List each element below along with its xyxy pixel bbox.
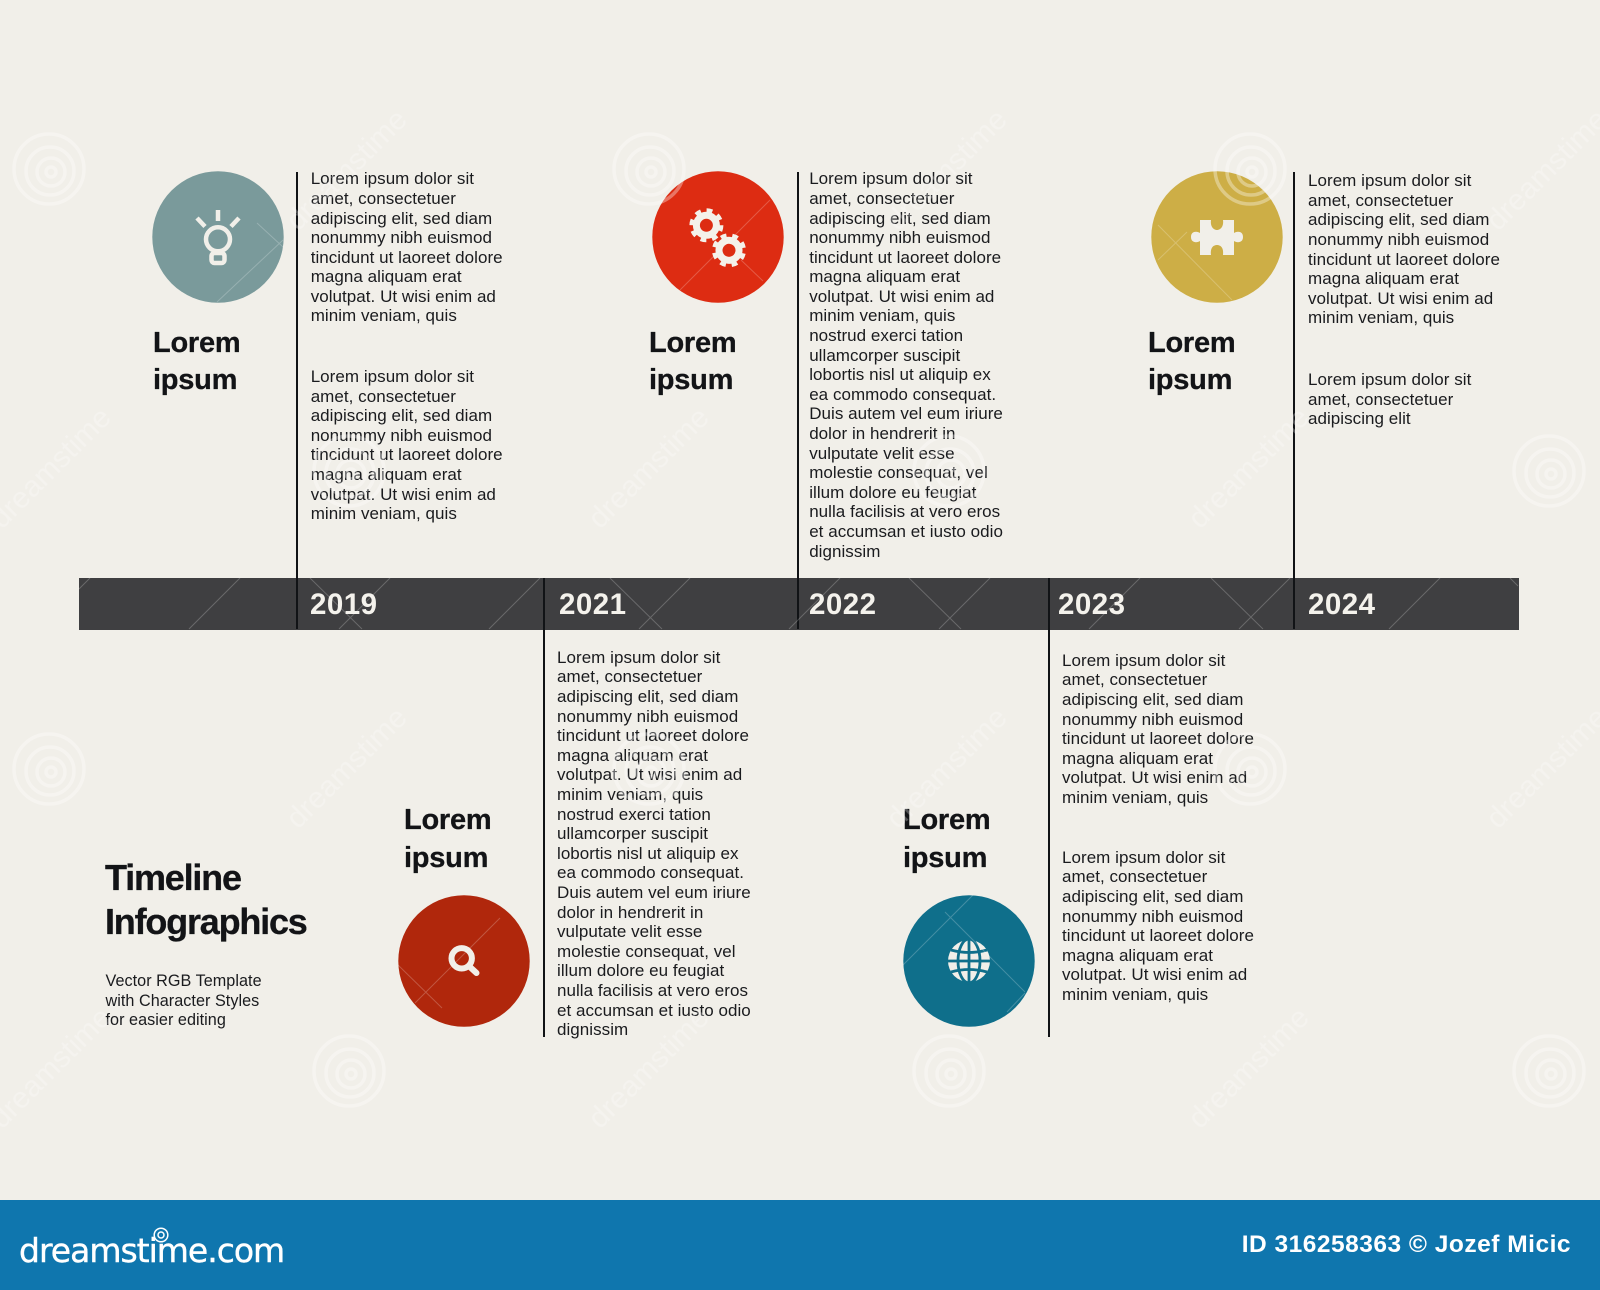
heading: Lorem (404, 804, 491, 836)
text block 2: volutpat. Ut wisi enim ad (311, 485, 496, 504)
heading (153, 326, 240, 396)
watermark overlay: dreamstime (1182, 1001, 1316, 1135)
watermark overlay: dreamstime (280, 103, 414, 237)
text block 2: amet, consectetuer (1062, 867, 1207, 886)
text block 2: amet, consectetuer (311, 387, 456, 406)
text block 1: adipiscing elit, sed diam (311, 208, 492, 228)
subtitle: for easier editing (106, 1011, 226, 1029)
text block: magna aliquam erat (809, 267, 960, 286)
watermark overlay: dreamstime (880, 701, 1014, 835)
heading (649, 326, 736, 396)
text block (809, 169, 1003, 561)
text block: Lorem ipsum dolor sit (557, 648, 720, 667)
text block: Duis autem vel eum iriure (809, 404, 1003, 423)
watermark overlay: dreamstime (280, 701, 414, 835)
text block 1: volutpat. Ut wisi enim ad (1062, 768, 1247, 787)
text block: nulla facilisis at vero eros (809, 502, 1000, 521)
vertical marker line (1293, 172, 1295, 629)
text block: minim veniam, quis (557, 785, 703, 804)
heading: Lorem (1148, 326, 1235, 358)
text block 2 (310, 367, 503, 523)
text block: ullamcorper suscipit (557, 824, 708, 843)
text block: ea commodo consequat. (809, 385, 996, 404)
panel: 2022 milestone (649, 169, 1003, 629)
text block 2: Lorem ipsum dolor sit (1308, 370, 1471, 389)
icon: light bulb in teal circle (152, 171, 284, 303)
text block: tincidunt ut laoreet dolore (557, 726, 749, 745)
watermark overlay: dreamstime (880, 103, 1014, 237)
title: Infographics (105, 900, 307, 942)
heading (903, 804, 990, 874)
title block (105, 856, 307, 1029)
text block 1: Lorem ipsum dolor sit (311, 169, 474, 188)
text block: nostrud exerci tation (809, 326, 963, 345)
year 2019: 2019 (310, 588, 377, 621)
text block 2: magna aliquam erat (1062, 946, 1213, 965)
text block 1: nonummy nibh euismod (311, 228, 492, 247)
text block: lobortis nisl ut aliquip ex (809, 365, 991, 384)
text block 2: magna aliquam erat (311, 465, 462, 484)
text block 1: Lorem ipsum dolor sit (1062, 651, 1225, 670)
heading: Lorem (903, 804, 990, 836)
text block 1: tincidunt ut laoreet dolore (1062, 729, 1254, 748)
year 2022: 2022 (809, 588, 876, 621)
icon: gears in red circle (652, 171, 784, 303)
heading: ipsum (903, 842, 987, 874)
logo text: dreamstime.com (19, 1231, 284, 1270)
text block 1: volutpat. Ut wisi enim ad (1308, 289, 1493, 308)
subtitle: Vector RGB Template (106, 972, 262, 990)
text block: volutpat. Ut wisi enim ad (557, 765, 742, 784)
text block: illum dolore eu feugiat (809, 483, 976, 502)
text block 1: nonummy nibh euismod (1062, 710, 1243, 729)
text block: dignissim (809, 542, 880, 561)
heading (404, 804, 491, 874)
text block (557, 648, 751, 1039)
text block 1: tincidunt ut laoreet dolore (311, 248, 503, 267)
text block 2: tincidunt ut laoreet dolore (1062, 926, 1254, 945)
text block 1: nonummy nibh euismod (1308, 230, 1489, 249)
panel: 2021 milestone (398, 578, 751, 1039)
text block 2: Lorem ipsum dolor sit (1062, 848, 1225, 867)
text block: molestie consequat, vel (809, 463, 988, 482)
text block 2: minim veniam, quis (1062, 985, 1208, 1004)
subtitle (106, 972, 262, 1029)
text block 2: Lorem ipsum dolor sit (311, 367, 474, 386)
text block: vulputate velit esse (809, 444, 955, 463)
text block 1: magna aliquam erat (1308, 269, 1459, 288)
text block 1: magna aliquam erat (311, 267, 462, 286)
text block 1: tincidunt ut laoreet dolore (1308, 250, 1500, 269)
text block 1: minim veniam, quis (1062, 788, 1208, 807)
heading: Lorem (153, 326, 240, 358)
text block: amet, consectetuer (809, 189, 954, 208)
text block 2: nonummy nibh euismod (1062, 907, 1243, 926)
heading: ipsum (649, 364, 733, 396)
text block: ea commodo consequat. (557, 863, 744, 882)
text block: nulla facilisis at vero eros (557, 981, 748, 1000)
text block 1: magna aliquam erat (1062, 749, 1213, 768)
text block: et accumsan et iusto odio (557, 1001, 751, 1020)
heading (1148, 326, 1235, 396)
icon: magnifier in dark red circle (398, 895, 530, 1027)
vertical marker line (543, 578, 545, 1037)
text block 2: amet, consectetuer (1308, 390, 1453, 409)
text block 2: adipiscing elit, sed diam (1062, 887, 1243, 906)
text block 2: adipiscing elit, sed diam (311, 406, 492, 425)
text block: illum dolore eu feugiat (557, 961, 724, 980)
text block: Lorem ipsum dolor sit (809, 169, 973, 188)
title (105, 856, 307, 942)
heading: ipsum (404, 842, 488, 874)
text block: amet, consectetuer (557, 667, 702, 686)
watermark overlay: dreamstime (1182, 401, 1316, 535)
text block: Duis autem vel eum iriure (557, 883, 751, 902)
text block: lobortis nisl ut aliquip ex (557, 844, 739, 863)
text block: volutpat. Ut wisi enim ad (809, 287, 994, 306)
logo spiral icon (153, 1228, 169, 1242)
text block: nonummy nibh euismod (809, 228, 990, 247)
text block: molestie consequat, vel (557, 942, 736, 961)
text block: nonummy nibh euismod (557, 707, 738, 726)
image credit: ID 316258363 © Jozef Micic (1242, 1231, 1571, 1258)
text block: minim veniam, quis (809, 306, 955, 325)
text block 2 (1308, 370, 1472, 428)
title: Timeline (105, 856, 241, 898)
text block: vulputate velit esse (557, 922, 702, 941)
text block: dolor in hendrerit in (809, 424, 956, 443)
text block: ullamcorper suscipit (809, 346, 960, 365)
text block 1 (1308, 171, 1500, 327)
text block 1: amet, consectetuer (1308, 191, 1453, 210)
text block: adipiscing elit, sed diam (809, 208, 991, 228)
text block: dolor in hendrerit in (557, 903, 703, 922)
footer band (0, 1200, 1600, 1290)
text block: dignissim (557, 1020, 628, 1039)
icon: puzzle piece in yellow circle (1151, 171, 1283, 303)
panel: 2023 milestone (903, 578, 1254, 1037)
text block 2: minim veniam, quis (311, 504, 457, 523)
panel: 2019 milestone (152, 169, 503, 629)
text block 1: volutpat. Ut wisi enim ad (311, 287, 496, 306)
text block: tincidunt ut laoreet dolore (809, 248, 1001, 267)
timeline bar with years (79, 578, 1518, 630)
heading: ipsum (153, 364, 237, 396)
text block 1 (310, 169, 503, 325)
text block 2: tincidunt ut laoreet dolore (311, 445, 503, 464)
text block: adipiscing elit, sed diam (557, 687, 738, 706)
heading: ipsum (1148, 364, 1232, 396)
text block: nostrud exerci tation (557, 805, 711, 824)
text block 2: nonummy nibh euismod (311, 426, 492, 445)
text block 2 (1062, 848, 1254, 1004)
text block 1: adipiscing elit, sed diam (1308, 210, 1489, 229)
year 2024: 2024 (1308, 588, 1375, 621)
year 2023: 2023 (1058, 588, 1125, 621)
vertical marker line (796, 172, 798, 629)
text block 1: amet, consectetuer (1062, 670, 1207, 689)
text block 1 (1062, 651, 1254, 807)
text block: magna aliquam erat (557, 746, 708, 765)
watermark overlay: dreamstime (582, 1001, 716, 1135)
subtitle: with Character Styles (106, 992, 259, 1010)
text block: et accumsan et iusto odio (809, 522, 1003, 541)
vertical marker line (1048, 578, 1050, 1037)
panel: 2024 milestone (1148, 171, 1500, 629)
heading: Lorem (649, 326, 736, 358)
text block 1: Lorem ipsum dolor sit (1308, 171, 1471, 190)
text block 2: volutpat. Ut wisi enim ad (1062, 965, 1247, 984)
year 2021: 2021 (559, 588, 626, 621)
text block 1: adipiscing elit, sed diam (1062, 690, 1243, 709)
text block 1: amet, consectetuer (311, 189, 456, 208)
text block 1: minim veniam, quis (311, 306, 457, 325)
icon: globe in blue circle (903, 895, 1035, 1027)
text block 1: minim veniam, quis (1308, 308, 1454, 327)
watermark overlay: dreamstime (582, 401, 716, 535)
vertical marker line (296, 172, 298, 629)
text block 2: adipiscing elit (1308, 409, 1411, 428)
